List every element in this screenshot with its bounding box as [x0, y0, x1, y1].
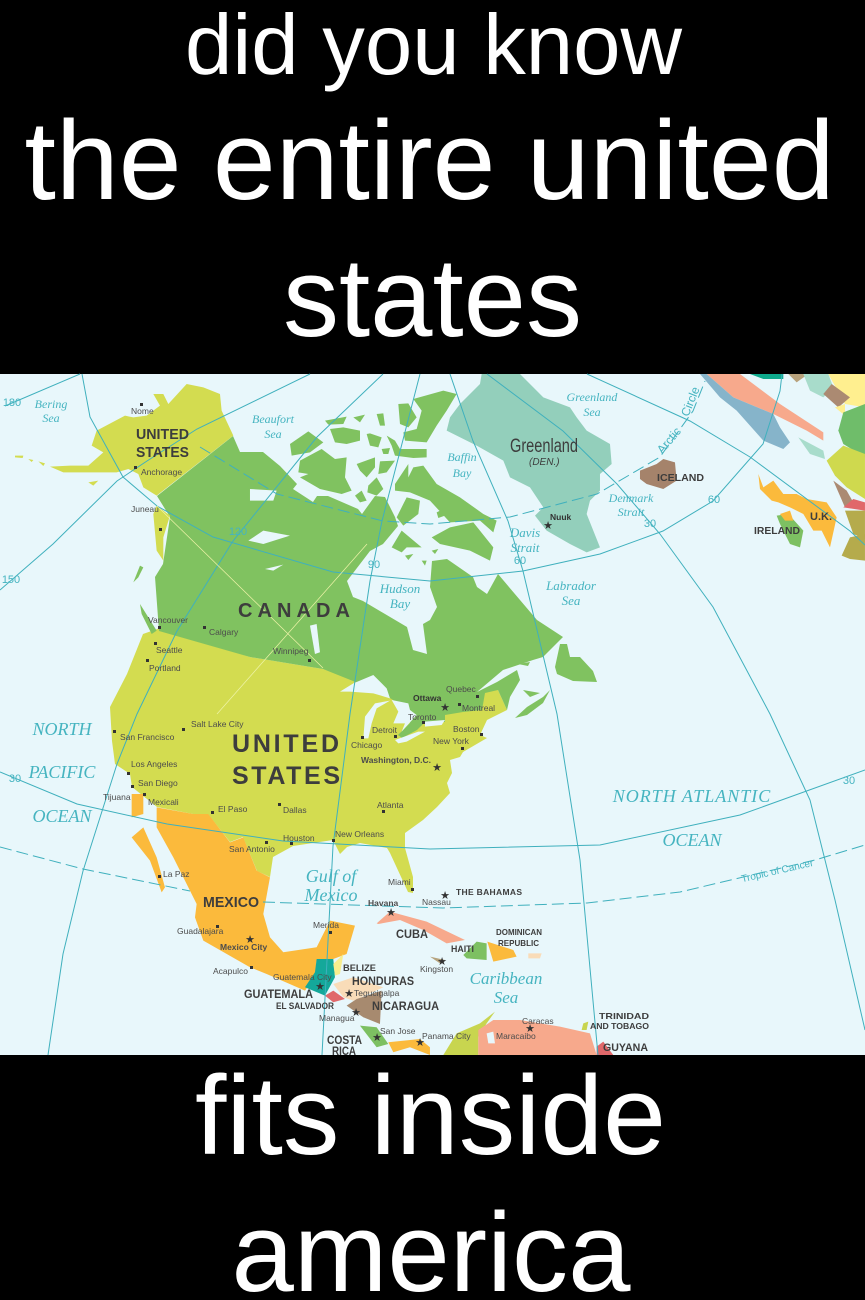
city markers: ★: [440, 702, 450, 714]
country labels: STATES: [232, 762, 340, 790]
Ireland: [777, 514, 803, 547]
city labels: New Orleans: [335, 829, 384, 839]
country labels: RICA: [332, 1044, 356, 1058]
rotated line names: Arctic: [654, 424, 684, 456]
city markers: ★: [415, 1037, 425, 1049]
country labels: HONDURAS: [352, 974, 414, 988]
graticule numbers: 150: [2, 574, 20, 586]
graticule numbers: 60: [514, 555, 526, 567]
sea labels: OCEAN: [662, 830, 722, 850]
country labels: DOMINICAN: [496, 927, 542, 937]
city labels: Toronto: [408, 712, 437, 722]
country labels: IRELAND: [754, 525, 800, 537]
Great Lakes: [340, 675, 445, 743]
city labels: Montreal: [462, 703, 495, 713]
sea labels: Beaufort: [252, 412, 295, 426]
city labels: Havana: [368, 898, 399, 908]
sea labels: Strait: [511, 540, 540, 555]
graticule numbers: 180: [3, 397, 21, 409]
sea labels: Hudson: [379, 581, 420, 596]
city labels: Guatemala City: [273, 972, 332, 982]
sea labels: Sea: [583, 405, 601, 419]
city markers: ★: [351, 1007, 361, 1019]
title second line: the entire united: [24, 98, 835, 223]
city labels: San Diego: [138, 778, 178, 788]
country labels: [136, 426, 832, 1058]
city markers: ★: [344, 988, 354, 1000]
sea labels: Sea: [562, 593, 581, 608]
country labels: REPUBLIC: [498, 938, 539, 948]
Canadian arctic islands: [290, 391, 497, 566]
sea labels: Denmark: [608, 491, 654, 505]
sea labels: Sea: [264, 427, 282, 441]
city labels: Winnipeg: [273, 646, 309, 656]
country labels: UNITED: [232, 730, 339, 758]
inland lakes of Canada: [248, 489, 320, 654]
city labels: Nome: [131, 406, 154, 416]
country labels: STATES: [136, 444, 189, 461]
sea labels: Mexico: [304, 885, 357, 905]
city labels: Kingston: [420, 964, 453, 974]
country labels: EL SALVADOR: [276, 1001, 334, 1011]
country labels: TRINIDAD: [599, 1011, 649, 1021]
city labels: Juneau: [131, 504, 159, 514]
map panel: [0, 374, 865, 1058]
sea labels: Davis: [509, 525, 540, 540]
city labels: Seattle: [156, 645, 183, 655]
sea labels: [28, 390, 771, 1007]
city labels: New York: [433, 736, 470, 746]
city labels: Atlanta: [377, 800, 404, 810]
sea labels: Strait: [618, 505, 645, 519]
country labels: NICARAGUA: [372, 999, 439, 1013]
graticule numbers: 90: [368, 559, 380, 571]
city labels: Nuuk: [550, 512, 572, 522]
city labels: Anchorage: [141, 467, 182, 477]
graticule numbers: 30: [9, 773, 21, 785]
Nova Scotia and Maritime islands: [515, 662, 550, 718]
country labels: CANADA: [238, 600, 350, 622]
city labels: San Antonio: [229, 844, 275, 854]
city labels: El Paso: [218, 804, 248, 814]
city labels: Mexico City: [220, 942, 268, 952]
sea labels: Caribbean: [470, 969, 542, 988]
Newfoundland: [555, 644, 597, 682]
country labels: ICELAND: [657, 472, 704, 484]
city labels: Boston: [453, 724, 480, 734]
city labels: Mexicali: [148, 797, 179, 807]
city labels: [103, 406, 572, 1041]
sea labels: OCEAN: [32, 806, 92, 826]
sea labels: NORTH: [31, 719, 93, 739]
city labels: Vancouver: [148, 615, 188, 625]
Iceland: [640, 459, 677, 489]
country labels: (DEN.): [529, 457, 560, 468]
sea labels: Bay: [453, 466, 472, 480]
country labels: BELIZE: [343, 963, 376, 974]
city labels: Washington, D.C.: [361, 755, 431, 765]
country labels: CUBA: [396, 927, 428, 941]
country labels: AND TOBAGO: [590, 1021, 649, 1031]
city markers: ★: [432, 762, 442, 774]
graticule lines: [0, 374, 865, 1055]
rotated line names: Circle: [678, 384, 703, 418]
city labels: Salt Lake City: [191, 719, 244, 729]
rotated line names: Tropic of Cancer: [740, 858, 815, 885]
Vancouver Island and Haida Gwaii: [133, 566, 157, 634]
city labels: Managua: [319, 1013, 355, 1023]
graticule numbers: 30: [843, 775, 855, 787]
city labels: Merida: [313, 920, 339, 930]
country labels: Greenland: [510, 436, 578, 457]
sea labels: PACIFIC: [28, 762, 96, 782]
city markers: ★: [386, 907, 396, 919]
graticule numbers: 60: [708, 494, 720, 506]
city markers: ★: [525, 1023, 535, 1035]
city labels: Guadalajara: [177, 926, 224, 936]
sea labels: Bay: [390, 596, 410, 611]
sea labels: Labrador: [545, 578, 597, 593]
city labels: Quebec: [446, 684, 477, 694]
city markers: [113, 403, 553, 1049]
Europe: [700, 374, 865, 561]
city markers: ★: [372, 1032, 382, 1044]
country labels: COSTA: [327, 1033, 362, 1047]
city labels: San Jose: [380, 1026, 416, 1036]
Caribbean and South America: [377, 912, 613, 1055]
Canada mainland: [155, 436, 563, 738]
city labels: Nassau: [422, 897, 451, 907]
Northern Ireland: [780, 511, 793, 521]
city labels: Acapulco: [213, 966, 248, 976]
graticule numbers: [2, 397, 855, 787]
city labels: Dallas: [283, 805, 307, 815]
sea labels: Sea: [42, 411, 60, 425]
sea labels: Bering: [35, 397, 67, 411]
bottom caption first line: fits inside: [195, 1053, 666, 1178]
Greenland: [447, 374, 612, 552]
city labels: Calgary: [209, 627, 239, 637]
city markers: ★: [245, 934, 255, 946]
city markers: ★: [315, 981, 325, 993]
United Kingdom: [758, 474, 837, 547]
city labels: La Paz: [163, 869, 189, 879]
graticule numbers: 120: [229, 526, 247, 538]
city labels: Detroit: [372, 725, 398, 735]
sea labels: Greenland: [567, 390, 618, 404]
city labels: Los Angeles: [131, 759, 177, 769]
country labels: THE BAHAMAS: [456, 887, 522, 897]
country labels: MEXICO: [203, 894, 259, 911]
sea labels: Gulf of: [306, 866, 359, 886]
city markers: ★: [437, 956, 447, 968]
city labels: Tijuana: [103, 792, 131, 802]
sea labels: Sea: [494, 988, 518, 1007]
city labels: San Francisco: [120, 732, 175, 742]
rotated line names: [654, 384, 815, 885]
country labels: GUATEMALA: [244, 987, 313, 1001]
title top line: did you know: [185, 0, 683, 93]
country labels: GUYANA: [603, 1042, 648, 1054]
country labels: HAITI: [451, 944, 474, 954]
city labels: Miami: [388, 877, 411, 887]
contiguous United States: [110, 628, 507, 893]
title third line: states: [283, 235, 582, 360]
city labels: Houston: [283, 833, 315, 843]
graticule numbers: 30: [644, 518, 656, 530]
country labels: U.K.: [810, 511, 832, 523]
sea labels: Baffin: [447, 450, 477, 464]
city labels: Portland: [149, 663, 181, 673]
sea labels: NORTH ATLANTIC: [612, 786, 771, 806]
city markers: ★: [543, 520, 553, 532]
Mexico and Central America: [132, 794, 430, 1055]
city labels: Ottawa: [413, 693, 442, 703]
Alaska: [15, 384, 233, 561]
city labels: Maracaibo: [496, 1031, 536, 1041]
city labels: Tegucigalpa: [354, 988, 400, 998]
country labels: UNITED: [136, 426, 189, 443]
city labels: Chicago: [351, 740, 382, 750]
city markers: ★: [440, 890, 450, 902]
city labels: Panama City: [422, 1031, 471, 1041]
city labels: Caracas: [522, 1016, 554, 1026]
